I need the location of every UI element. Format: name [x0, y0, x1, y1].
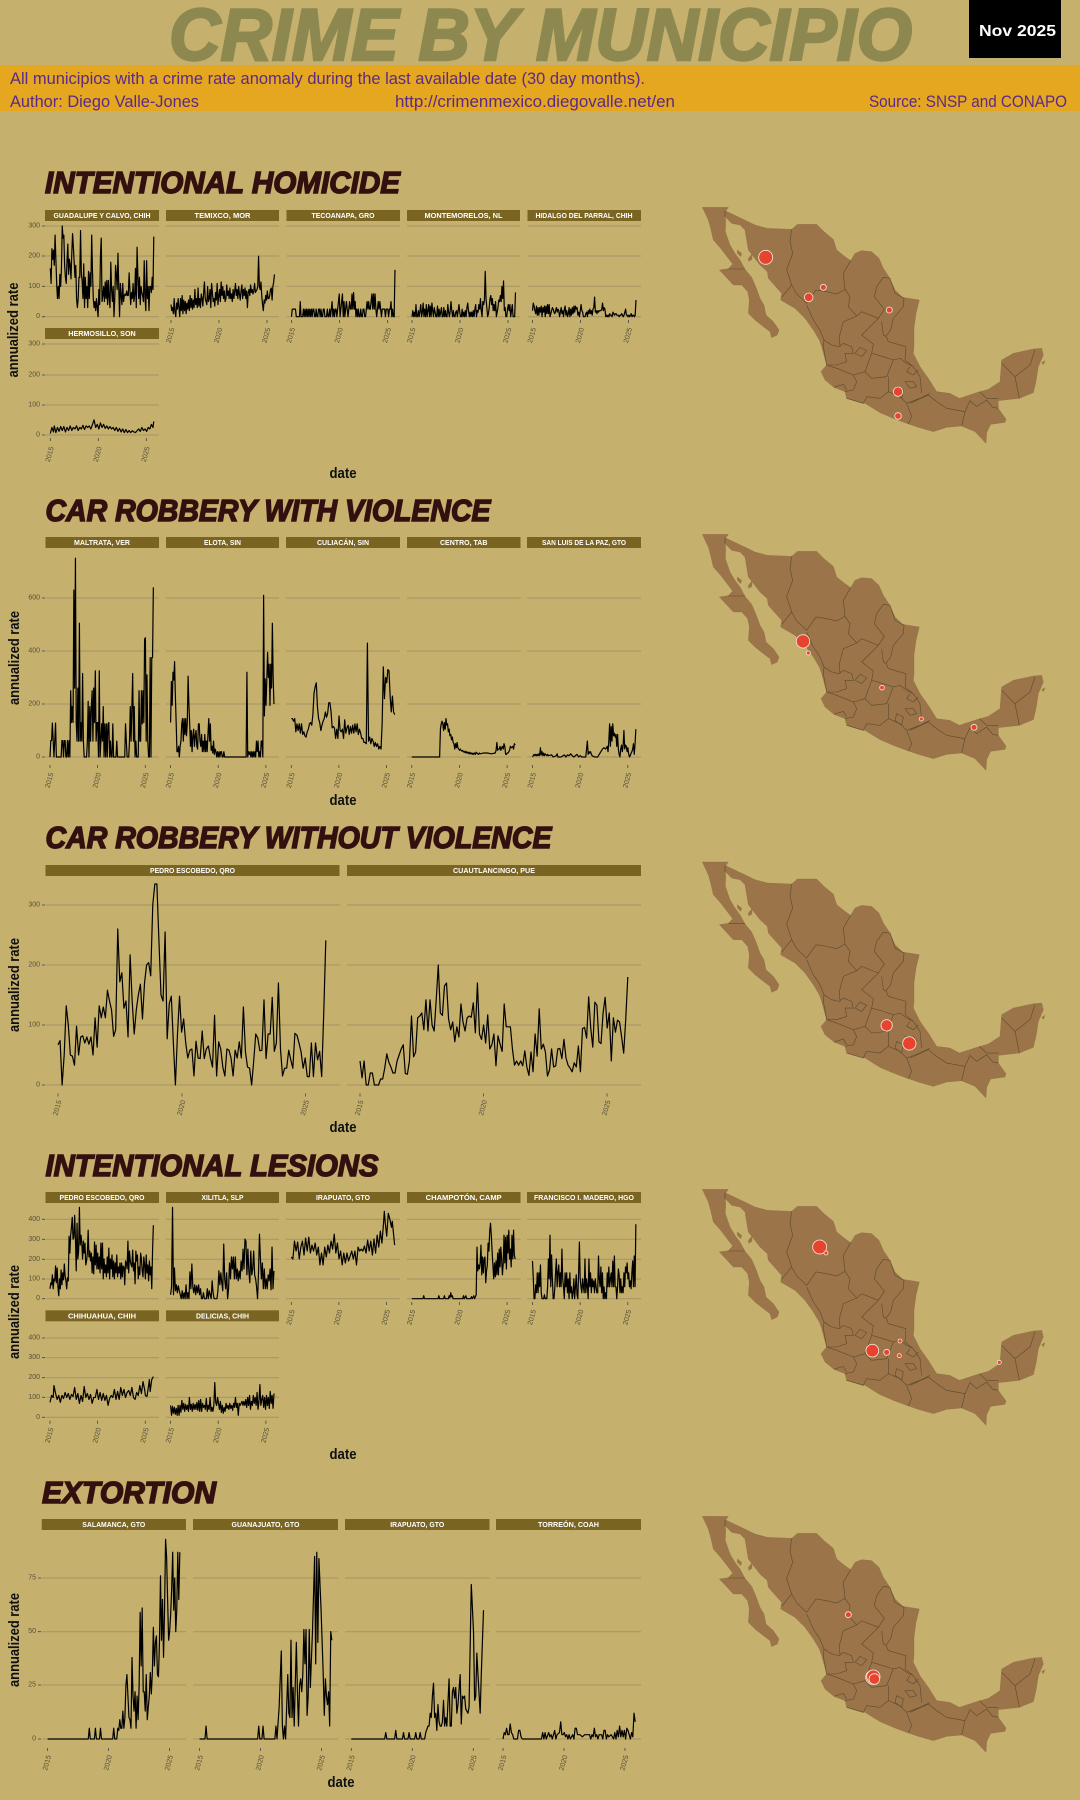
panel: car robbery without violence: [6, 820, 1045, 1136]
facet: Temixco: [166, 210, 279, 344]
heading: car robbery without violence: CAR ROBBERY WITHOUT VIOLENCE: [46, 820, 553, 855]
panel: intentional homicide: [5, 165, 1045, 482]
facet: Cuautlancingo: 2020: [478, 1099, 489, 1116]
facet: Salamanca: 2020: [103, 1754, 114, 1771]
map: extortion: [702, 1516, 1045, 1752]
facet: Centro: CENTRO, TAB: [440, 538, 488, 547]
facet: Culiacan: CULIACÁN, SIN: [317, 538, 369, 547]
facet: Guadalupe y Calvo: 200: [28, 252, 40, 260]
facet: Salamanca: 50: [28, 1628, 36, 1635]
facet: Pedro Escobedo: 300: [28, 902, 40, 908]
facet: Irapuato: IRAPUATO, GTO: [316, 1193, 370, 1202]
facet: Culiacan: 2015: [286, 772, 297, 789]
info band: Author: Diego Valle-Jones: [10, 92, 199, 111]
x axis title: date: [330, 1446, 356, 1463]
x axis title: date: [328, 1774, 354, 1791]
y axis title: annualized rate: [6, 938, 23, 1032]
facet: Irapuato: 2020: [407, 1754, 418, 1771]
facet: Francisco I. Madero: 2020: [575, 1309, 586, 1326]
facet: Salamanca: 2015: [42, 1754, 53, 1771]
facet: Montemorelos: MONTEMORELOS, NL: [424, 211, 503, 220]
facet: Irapuato: 2015: [346, 1754, 357, 1771]
facet: San Luis de la Paz: [527, 537, 641, 789]
facet: Delicias: 2025: [261, 1427, 271, 1444]
facet: Hermosillo: 300: [28, 340, 40, 348]
facet: Montemorelos: [407, 210, 520, 344]
facet: Maltrata: 2020: [92, 772, 103, 789]
facet: Irapuato: [345, 1519, 490, 1771]
facet: Salamanca: [28, 1519, 186, 1771]
x axis title: date: [330, 465, 356, 482]
facet: Centro: 2025: [502, 772, 513, 789]
facet: Pedro Escobedo: 0: [36, 1082, 40, 1088]
facet: Delicias: [165, 1310, 279, 1444]
facet: Maltrata: 2015: [45, 772, 55, 789]
facet: Guadalupe y Calvo: 0: [36, 313, 40, 320]
facet: Irapuato: IRAPUATO, GTO: [390, 1520, 444, 1529]
facet: Salamanca: 2025: [164, 1754, 175, 1771]
facet: San Luis de la Paz: 2015: [527, 772, 538, 789]
facet: Guadalupe y Calvo: 300: [28, 222, 40, 230]
facet: Hidalgo del Parral: 2015: [527, 327, 538, 344]
facet: San Luis de la Paz: 2025: [622, 772, 633, 789]
heading: car robbery with violence: CAR ROBBERY WITH VIOLENCE: [46, 493, 492, 528]
facet: Cuautlancingo: 2025: [602, 1099, 612, 1116]
facet: Guanajuato: 2025: [316, 1754, 327, 1771]
facet: Maltrata: [28, 537, 159, 789]
facet: Guanajuato: [193, 1519, 338, 1771]
facet: Temixco: 2025: [262, 327, 272, 344]
facet: Hidalgo del Parral: 2020: [575, 327, 586, 344]
facet: Culiacan: 2020: [334, 772, 344, 789]
facet: Chihuahua: 300: [28, 1354, 40, 1361]
facet: Hidalgo del Parral: [527, 210, 641, 344]
facet: Irapuato: [286, 1192, 400, 1326]
y axis title: annualized rate: [6, 611, 23, 705]
facet: Francisco I. Madero: 2015: [527, 1309, 538, 1326]
date badge: [969, 0, 1061, 58]
facet: Irapuato: 2025: [381, 1309, 392, 1326]
heading: intentional homicide: INTENTIONAL HOMICIDE: [45, 165, 401, 200]
facet: Francisco I. Madero: FRANCISCO I. MADERO, HGO: [534, 1193, 634, 1202]
facet: Champoton: [406, 1192, 520, 1326]
facet: Chihuahua: CHIHUAHUA, CHIH: [68, 1311, 136, 1320]
facet: Pedro Escobedo: PEDRO ESCOBEDO, QRO: [60, 1193, 145, 1202]
facet: Temixco: 2015: [166, 327, 176, 344]
facet: Centro: 2020: [454, 772, 465, 789]
facet: Chihuahua: 200: [28, 1374, 40, 1381]
facet: Tecoanapa: [286, 210, 400, 344]
y axis title: annualized rate: [6, 1593, 23, 1687]
facet: Elota: 2025: [261, 772, 271, 789]
facet: Guanajuato: GUANAJUATO, GTO: [232, 1520, 300, 1529]
facet: Maltrata: 2025: [140, 772, 151, 789]
facet: Salamanca: 25: [28, 1682, 36, 1688]
facet: Torreon: 2025: [620, 1754, 630, 1771]
facet: Delicias: 2015: [165, 1427, 176, 1444]
facet: Cuautlancingo: CUAUTLANCINGO, PUE: [453, 866, 535, 875]
facet: Chihuahua: 400: [28, 1334, 40, 1342]
facet: Montemorelos: 2020: [455, 327, 465, 344]
facet: Francisco I. Madero: 2025: [622, 1309, 633, 1326]
facet: Champoton: 2025: [502, 1309, 513, 1326]
facet: Culiacan: 2025: [381, 772, 392, 789]
facet: Hidalgo del Parral: HIDALGO DEL PARRAL, CHIH: [536, 211, 632, 220]
facet: Elota: ELOTA, SIN: [204, 538, 241, 547]
facet: Chihuahua: 2015: [45, 1427, 55, 1444]
facet: Pedro Escobedo: [28, 1192, 159, 1302]
facet: San Luis de la Paz: SAN LUIS DE LA PAZ, GTO: [542, 538, 626, 547]
facet: Chihuahua: 100: [28, 1394, 40, 1401]
facet: Xilitla: XILITLA, SLP: [202, 1193, 244, 1202]
x axis title: date: [330, 792, 356, 809]
facet: Hermosillo: 2015: [45, 446, 56, 463]
facet: Cuautlancingo: [347, 865, 641, 1116]
facet: Irapuato: 2020: [334, 1309, 344, 1326]
info band: [0, 65, 1080, 111]
map: homicide municipalities: [702, 207, 1045, 443]
facet: Chihuahua: 0: [36, 1414, 40, 1421]
facet: Montemorelos: 2015: [407, 327, 417, 344]
facet: Champoton: 2015: [406, 1309, 417, 1326]
facet: Irapuato: 2015: [286, 1309, 297, 1326]
facet: Maltrata: 200: [28, 700, 40, 708]
facet: Cuautlancingo: 2015: [355, 1099, 365, 1116]
y axis title: annualized rate: [5, 282, 22, 378]
facet: Chihuahua: 2020: [92, 1427, 103, 1444]
facet: Hermosillo: 100: [28, 402, 40, 408]
facet: Pedro Escobedo: 200: [28, 1256, 40, 1263]
panel: extortion: [6, 1475, 1045, 1791]
facet: Montemorelos: 2025: [503, 327, 513, 344]
facet: Pedro Escobedo: 100: [28, 1276, 40, 1282]
facet: Salamanca: SALAMANCA, GTO: [82, 1520, 145, 1529]
map: car robbery with violence: [702, 534, 1045, 770]
facet: San Luis de la Paz: 2020: [575, 772, 586, 789]
facet: Hermosillo: 2025: [141, 446, 152, 463]
facet: Salamanca: 75: [28, 1574, 36, 1582]
facet: Pedro Escobedo: PEDRO ESCOBEDO, QRO: [150, 866, 235, 875]
map: car robbery without violence: [702, 862, 1045, 1098]
facet: Hermosillo: 0: [36, 432, 40, 438]
facet: Guadalupe y Calvo: [28, 210, 159, 320]
facet: Temixco: TEMIXCO, MOR: [194, 211, 251, 220]
facet: Xilitla: [166, 1192, 279, 1299]
facet: Maltrata: 400: [28, 648, 40, 654]
facet: Culiacan: [286, 537, 400, 789]
facet: Delicias: DELICIAS, CHIH: [196, 1311, 249, 1320]
facet: Centro: 2015: [406, 772, 417, 789]
facet: Pedro Escobedo: 100: [28, 1022, 40, 1028]
info band: http://crimenmexico.diegovalle.net/en: [395, 92, 675, 111]
facet: Pedro Escobedo: 200: [28, 962, 40, 968]
facet: Francisco I. Madero: [527, 1192, 641, 1326]
facet: Hermosillo: 2020: [93, 446, 104, 463]
facet: Hidalgo del Parral: 2025: [623, 327, 634, 344]
facet: Salamanca: 0: [32, 1736, 36, 1742]
facet: Maltrata: MALTRATA, VER: [74, 538, 131, 547]
heading: extortion: EXTORTION: [42, 1475, 217, 1510]
facet: Temixco: 2020: [214, 327, 224, 344]
facet: Tecoanapa: TECOANAPA, GRO: [312, 211, 375, 220]
x axis title: date: [330, 1119, 356, 1136]
y axis title: annualized rate: [6, 1265, 23, 1359]
facet: Hermosillo: [28, 328, 159, 463]
facet: Delicias: 2020: [213, 1427, 224, 1444]
facet: Guadalupe y Calvo: GUADALUPE Y CALVO, CHIH: [54, 211, 150, 220]
facet: Elota: 2020: [213, 772, 224, 789]
facet: Torreon: 2015: [498, 1754, 508, 1771]
facet: Pedro Escobedo: 400: [28, 1216, 40, 1223]
facet: Champoton: CHAMPOTÓN, CAMP: [426, 1193, 502, 1202]
facet: Torreon: 2020: [559, 1754, 569, 1771]
facet: Torreon: TORREÓN, COAH: [538, 1520, 599, 1529]
facet: Guanajuato: 2015: [194, 1754, 205, 1771]
facet: Pedro Escobedo: 2015: [53, 1099, 63, 1116]
facet: Maltrata: 600: [28, 594, 40, 602]
facet: Irapuato: 2025: [468, 1754, 479, 1771]
facet: Tecoanapa: 2020: [334, 327, 345, 344]
facet: Centro: [406, 537, 520, 789]
facet: Tecoanapa: 2025: [382, 327, 393, 344]
facet: Hermosillo: HERMOSILLO, SON: [68, 329, 136, 338]
facet: Pedro Escobedo: 2025: [300, 1099, 311, 1116]
map: intentional lesions: [702, 1189, 1045, 1425]
facet: Maltrata: 0: [36, 754, 40, 760]
info band: All municipios with a crime rate anomaly during the last available date (30 day months).: [10, 69, 645, 88]
facet: Guanajuato: 2020: [255, 1754, 266, 1771]
facet: Champoton: 2020: [454, 1309, 465, 1326]
facet: Elota: [165, 537, 279, 789]
facet: Chihuahua: [28, 1310, 159, 1444]
facet: Chihuahua: 2025: [140, 1427, 151, 1444]
facet: Pedro Escobedo: 2020: [177, 1099, 187, 1116]
facet: Pedro Escobedo: 300: [28, 1236, 40, 1243]
facet: Hermosillo: 200: [28, 372, 40, 378]
panel: intentional lesions: [6, 1148, 1045, 1463]
panel: car robbery with violence: [6, 493, 1045, 809]
facet: Torreon: [496, 1519, 641, 1771]
facet: Pedro Escobedo: 0: [36, 1295, 40, 1302]
facet: Pedro Escobedo: [28, 865, 340, 1116]
facet: Tecoanapa: 2015: [286, 327, 297, 344]
facet: Elota: 2015: [165, 772, 176, 789]
date badge: Nov 2025: [979, 23, 1056, 40]
facet: Guadalupe y Calvo: 100: [28, 283, 40, 290]
heading: intentional lesions: INTENTIONAL LESIONS: [46, 1148, 379, 1183]
